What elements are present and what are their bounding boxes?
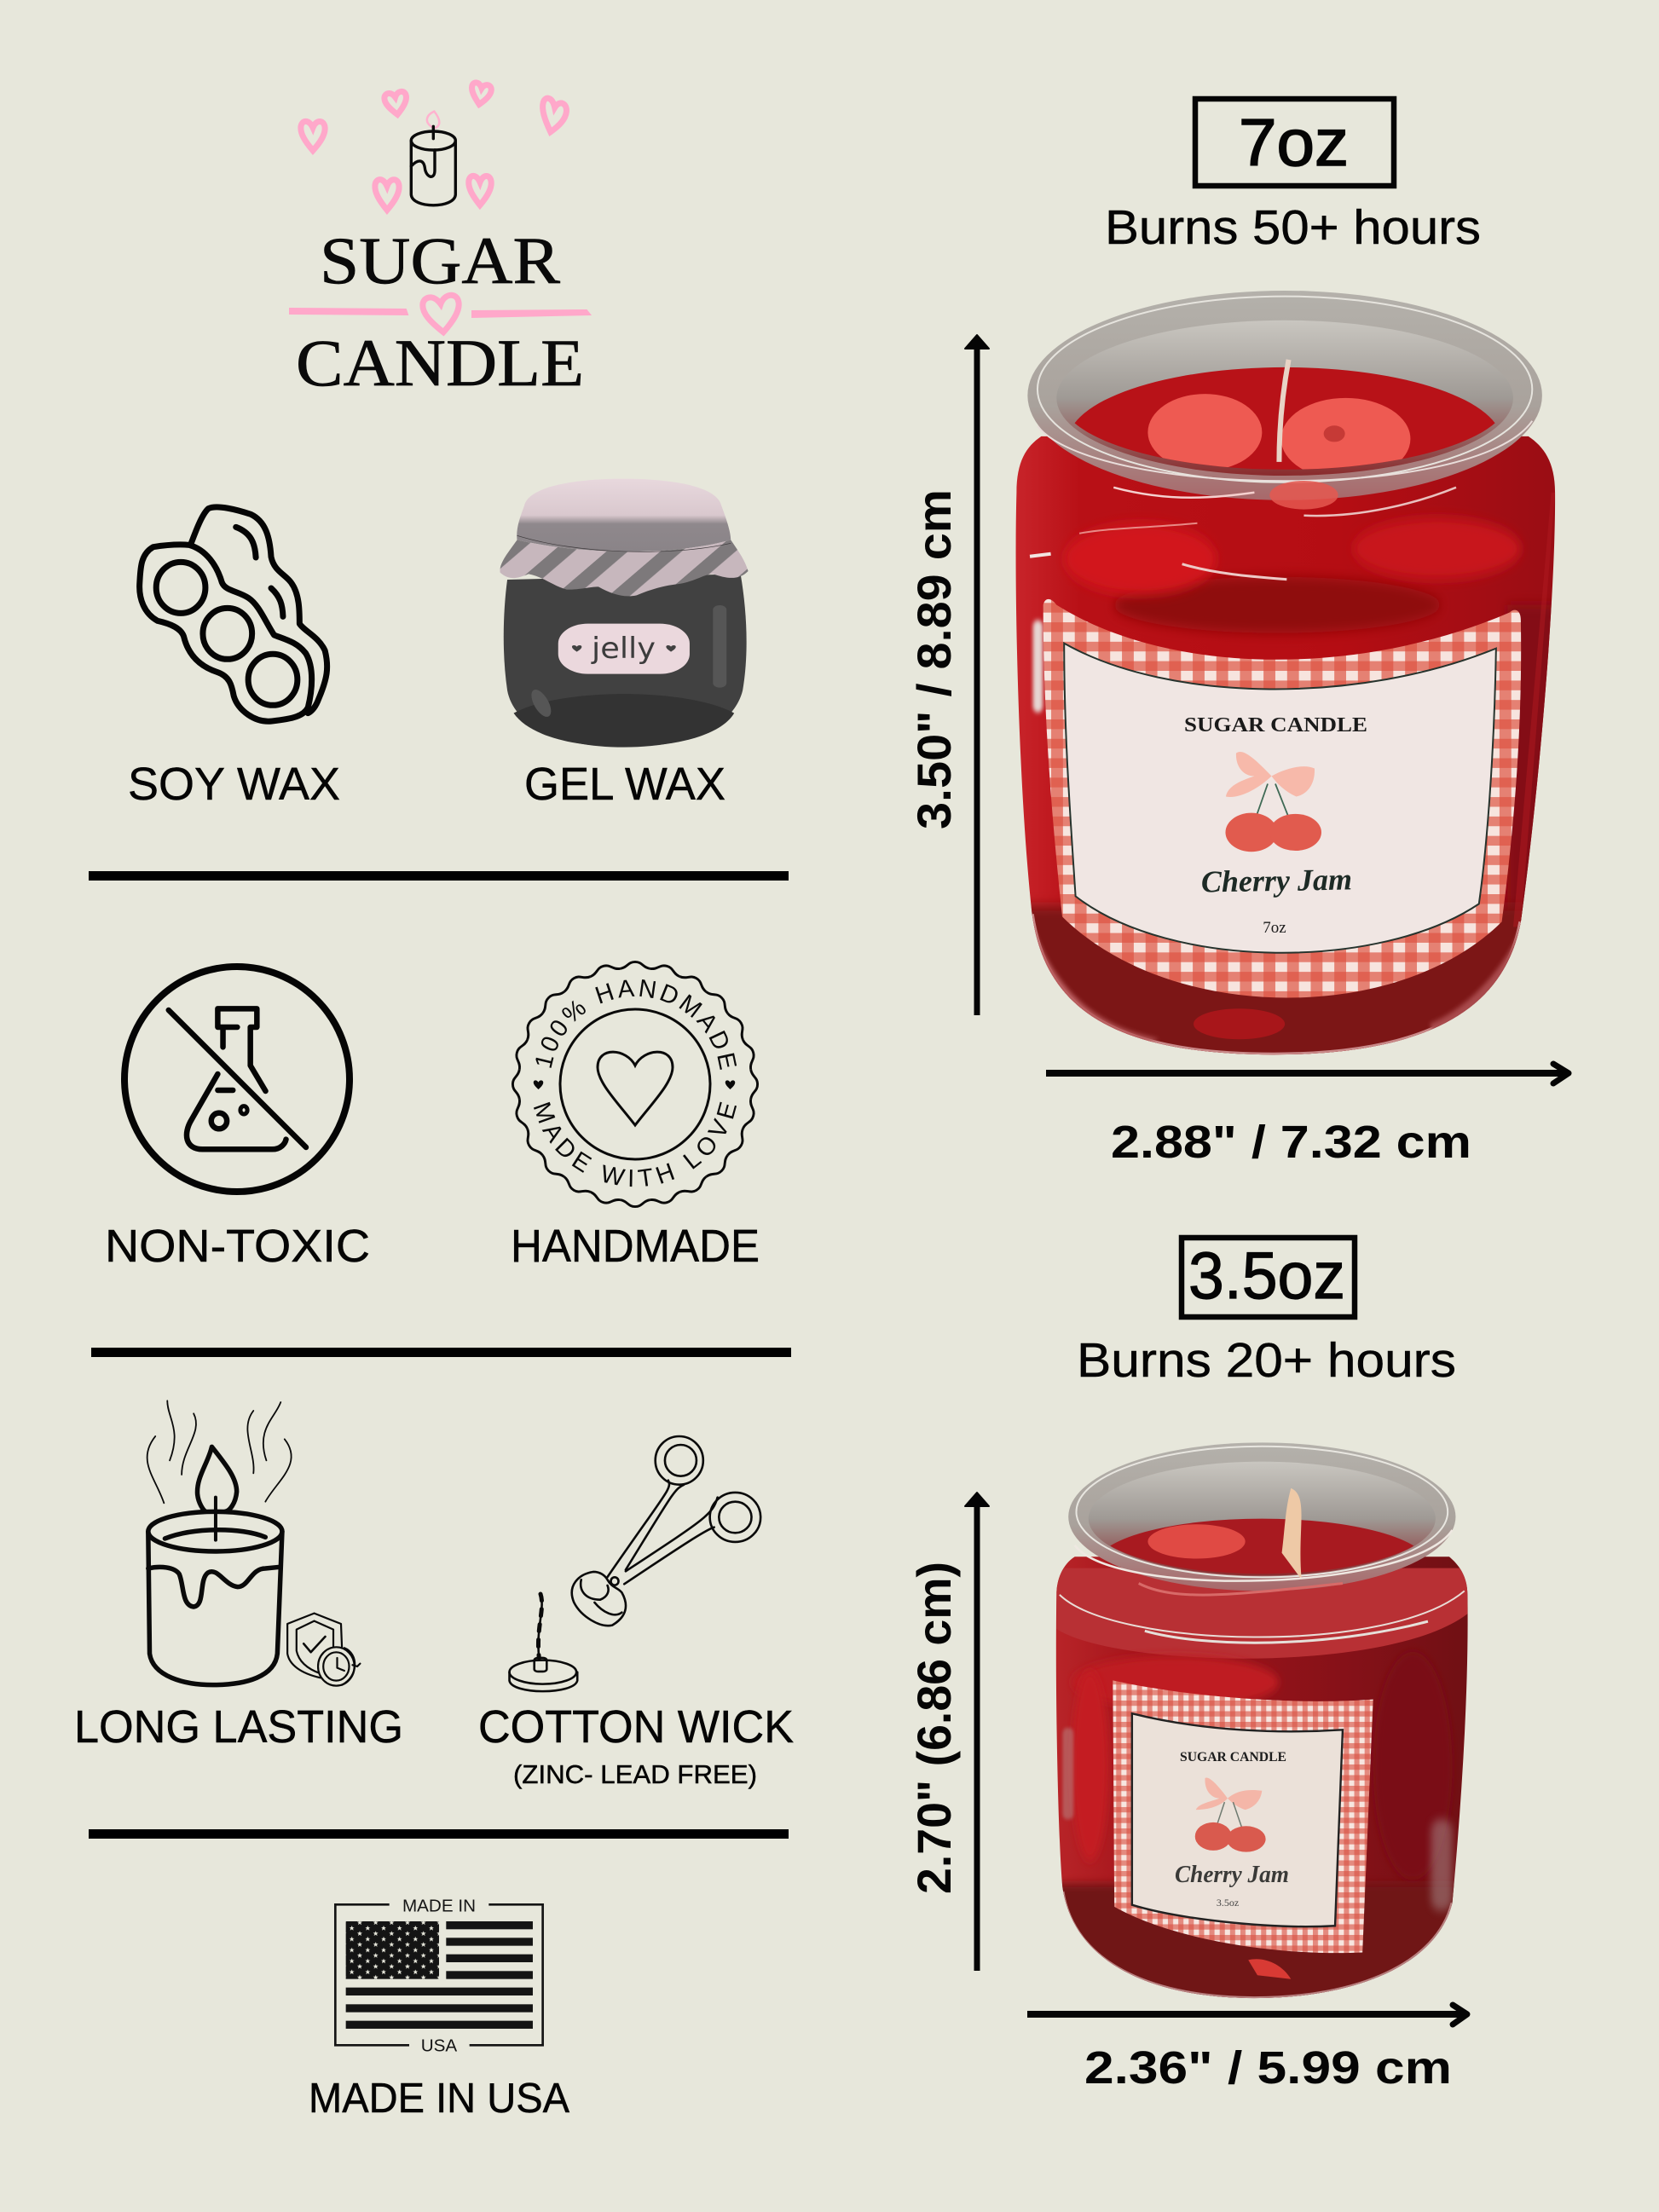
divider: pink brush lines with heart [290, 294, 590, 334]
dimension: 3.5oz height: 2.70" (6.86 cm) [907, 1562, 961, 1894]
icon: non-toxic flask [124, 967, 350, 1192]
label: HANDMADE: HANDMADE [511, 1221, 760, 1272]
photo: 3.5oz cherry jam candle jar: SUGAR CANDLE [1180, 1750, 1286, 1764]
dimension: 7oz height: 3.50" / 8.89 cm [907, 489, 961, 829]
photo: 3.5oz cherry jam candle jar [1041, 1442, 1486, 2013]
icon: handmade badge [512, 961, 759, 1208]
icon: handmade badge: 100% HANDMADE [535, 979, 737, 1070]
label: NON-TOXIC: NON-TOXIC [105, 1221, 370, 1272]
icon: soy wax [140, 507, 327, 721]
arrow: 3.5oz width [1027, 2005, 1467, 2024]
logo: Sugar Candle [290, 82, 590, 400]
icon: floating pink hearts [301, 82, 568, 210]
photo: 3.5oz cherry jam candle jar: 3.5oz [1217, 1897, 1239, 1909]
heading: SUGAR: SUGAR [320, 223, 560, 297]
arrow: 7oz width [1046, 1064, 1569, 1083]
text: burns 20+ hours: Burns 20+ hours [1077, 1333, 1456, 1388]
divider [91, 1348, 791, 1357]
label: zinc and lead free: (ZINC- LEAD FREE) [513, 1759, 757, 1789]
label: COTTON WICK: COTTON WICK [478, 1701, 794, 1753]
photo: 3.5oz cherry jam candle jar: Cherry Jam [1175, 1862, 1289, 1888]
badge: 7oz: 7oz [1239, 105, 1349, 180]
icon: handmade badge: MADE WITH LOVE [534, 1101, 737, 1187]
badge: 3.5oz: 3.5oz [1188, 1238, 1345, 1313]
icon: candle [411, 112, 455, 205]
arrow: 3.5oz height [965, 1493, 989, 1971]
photo: 7oz cherry jam candle jar: Cherry Jam [1201, 862, 1352, 899]
badge: 7oz [1195, 99, 1394, 186]
label: MADE IN USA: MADE IN USA [309, 2076, 569, 2122]
icon: burning candle with shield and clock [147, 1401, 360, 1686]
dimension: 3.5oz width: 2.36" / 5.99 cm [1084, 2042, 1452, 2094]
divider [89, 1829, 789, 1839]
photo: 7oz cherry jam candle jar [1003, 291, 1566, 1080]
badge scalloped edge [512, 962, 758, 1207]
photo: 7oz cherry jam candle jar: 7oz [1263, 919, 1286, 937]
jar label text: jelly: jelly [591, 632, 656, 666]
arrow: 7oz height [965, 335, 989, 1015]
label: GEL WAX: GEL WAX [524, 759, 725, 810]
photo: 7oz cherry jam candle jar: SUGAR CANDLE [1184, 714, 1367, 736]
icon: wick trimmer and cotton wick [510, 1436, 760, 1691]
label: SOY WAX: SOY WAX [128, 759, 340, 810]
heading: CANDLE: CANDLE [296, 326, 584, 400]
text: burns 50+ hours: Burns 50+ hours [1105, 200, 1481, 255]
divider [89, 871, 789, 881]
dimension: 7oz width: 2.88" / 7.32 cm [1111, 1117, 1471, 1168]
icon: Made in USA flag [335, 1896, 543, 2055]
icon: Made in USA flag: MADE IN [402, 1896, 476, 1915]
label: LONG LASTING: LONG LASTING [74, 1701, 403, 1753]
icon: jelly jar [500, 479, 749, 748]
icon: Made in USA flag: USA [421, 2036, 457, 2055]
